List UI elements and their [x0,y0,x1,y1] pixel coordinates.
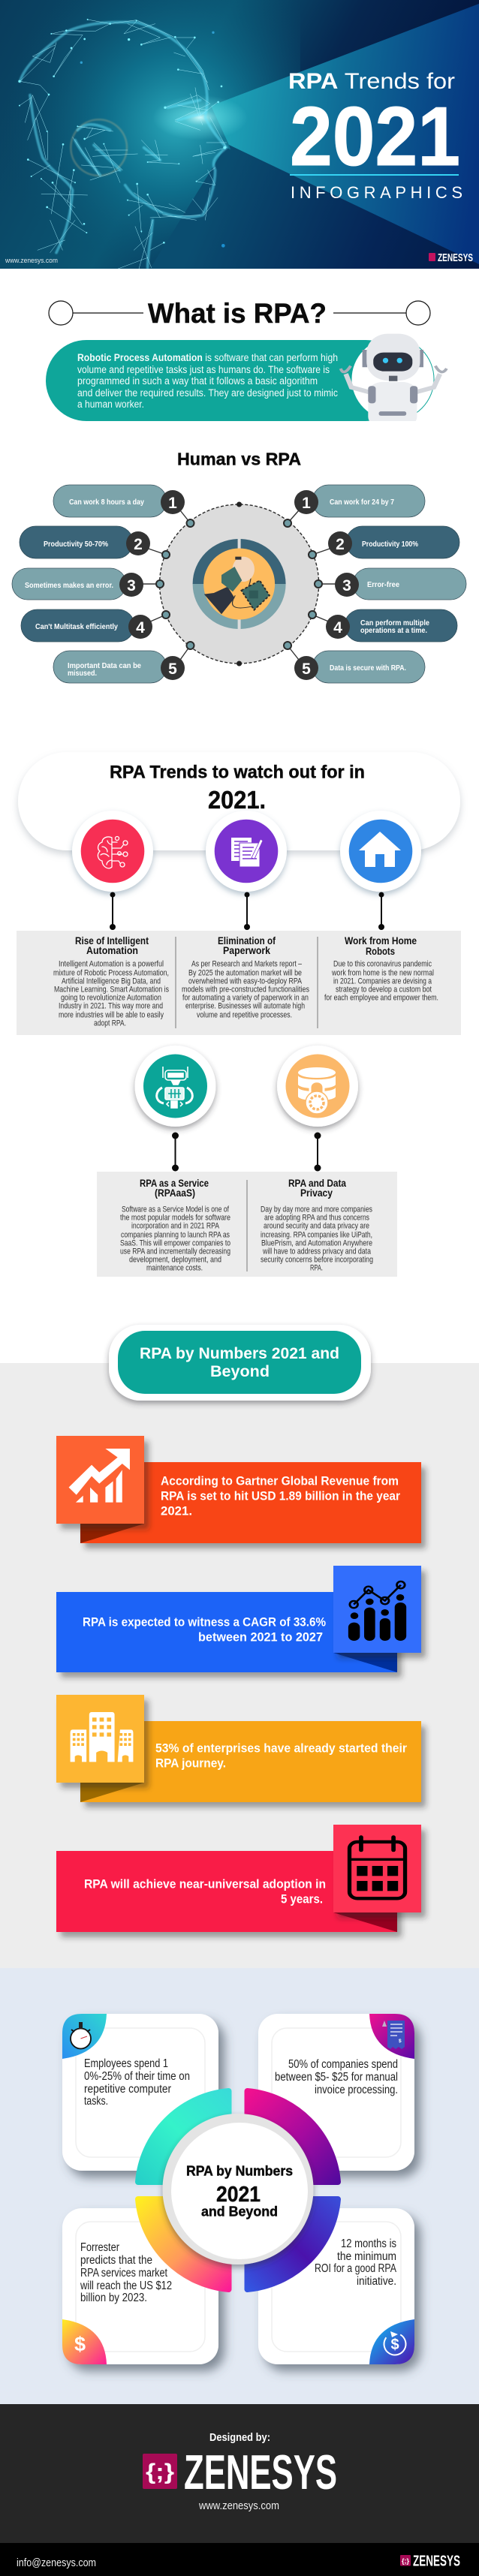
illustration: wireframe head [18,19,248,269]
trend: work from home robots: for each employee and empower them. [324,994,438,1003]
connectors: top row [110,892,384,930]
RPA item 3: 3 [342,577,351,594]
icon: invoice [382,2021,405,2049]
connector lines [139,510,339,660]
human item 3: Sometimes makes an error. [25,581,113,590]
icon: buildings [71,1712,133,1762]
human item 2: Productivity 50-70% [44,540,109,549]
trend: elimination of paperwork: for automating a variety of paperwork in an [182,994,309,1003]
logo: small [400,2553,460,2570]
trend: elimination of paperwork: Paperwork [223,945,270,956]
text [155,1741,408,1770]
card: ROI [258,2208,414,2364]
trend: rise of intelligent automation [53,935,169,1028]
icon: dollar: $ [74,2333,86,2355]
hero title: 2021 [290,90,460,183]
icon: human and robot handshake [204,557,270,614]
definition text: and deliver the required results. They are designed just to mimic [77,387,338,399]
trend: RPA as a service: RPA as a Service [140,1178,209,1189]
center ring: RPA by numbers [138,2091,338,2289]
heading: RPA by numbers: RPA by Numbers 2021 and [140,1344,339,1362]
text: invoice processing. [315,2084,398,2096]
human item 5: misused. [68,669,97,678]
human item 1: 1 [168,495,177,512]
text [275,2058,398,2096]
RPA item 2 [328,526,459,558]
trend: rise of intelligent automation: Automation [86,945,138,956]
trend: work from home robots: Due to this coronavirus pandemic [333,959,432,968]
center text: and Beyond [201,2204,278,2219]
text [84,2057,190,2108]
text: between 2021 to 2027 [198,1630,323,1644]
trend: RPA and data privacy: BluePrism, and Automation Anywhere [261,1238,372,1247]
text: 2021. [161,1504,192,1518]
trend: RPA and data privacy: are adopting RPA and thus concerns [264,1213,369,1222]
RPA item 3: Error-free [367,580,399,589]
trend: RPA and data privacy: Privacy [300,1187,333,1199]
panel: three trends [17,931,461,1035]
text: RPA will achieve near-universal adoption in [84,1878,326,1891]
hero logo [429,253,473,261]
card: invoice processing [258,2014,414,2171]
text: RPA is set to hit USD 1.89 billion in the year [161,1489,401,1503]
definition text: a human worker. [77,399,144,410]
human item 3: 3 [127,577,136,594]
trend icons row [72,811,421,892]
trend: RPA as a service: development, deployment, and [129,1255,221,1264]
footer bar: info@zenesys.com [17,2556,96,2569]
RPA item 1: 1 [302,495,311,512]
trend: rise of intelligent automation: Intelligent Automation is a powerful [59,959,164,968]
definition text: Robotic Process Automation is software that can perform high [77,352,338,363]
hero title: INFOGRAPHICS [291,183,462,202]
icon: invoice: $ [399,2039,402,2044]
human item 5: 5 [168,661,177,678]
text: the minimum [337,2250,396,2263]
dots and nodes [156,501,322,667]
RPA item 3 [335,568,466,600]
logo: large: ZENESYS [184,2445,337,2499]
ring segments [138,2091,338,2289]
text: billion by 2023. [80,2292,147,2304]
trend: rise of intelligent automation: Rise of Intelligent [75,935,149,946]
trend: elimination of paperwork: As per Research and Markets report – [191,959,303,968]
trend: rise of intelligent automation: mixture of Robotic Process Automation, [53,968,169,977]
trend: RPA as a service: companies planning to launch RPA as [121,1231,230,1240]
icon: growth arrow [69,1449,130,1503]
hero website: www.zenesys.com [5,257,58,265]
trend: rise of intelligent automation: Industry in 2021. This way more and [59,1001,163,1010]
RPA item 2: 2 [336,536,345,553]
footer: designed by: Designed by: [209,2431,270,2444]
text: initiative. [357,2275,396,2288]
card: services market [62,2208,218,2364]
text: Forrester [80,2241,119,2254]
trend: elimination of paperwork: volume and repetitive processes. [197,1010,292,1019]
human item 4: Can't Multitask efficiently [35,622,118,631]
central disc [160,504,319,664]
trend: RPA as a service: use RPA and incrementally decreasing [120,1247,230,1256]
logo: small: {;} [402,2557,409,2565]
text: RPA is expected to witness a CAGR of 33.6% [83,1615,326,1629]
definition text: programmed in such a way that it follows a basic algorithm [77,375,318,387]
trend: elimination of paperwork: models with pre-constructed functionalities [182,985,309,994]
trend: RPA and data privacy: RPA. [310,1264,323,1273]
text [84,1878,326,1906]
ring around handshake [193,539,286,629]
text: 0%-25% of their time on [84,2070,190,2083]
heading: RPA by numbers: Beyond [210,1362,270,1380]
trend: RPA as a service: (RPAaaS) [155,1187,195,1199]
text: According to Gartner Global Revenue from [161,1474,399,1488]
heading: human vs RPA: Human vs RPA [177,449,301,468]
RPA item 1: Can work for 24 by 7 [330,498,394,507]
trend: elimination of paperwork: Elimination of [218,935,276,946]
footer: designed by: www.zenesys.com [198,2500,279,2512]
trend: elimination of paperwork [182,935,309,1019]
RPA item 5: 5 [302,661,311,678]
text: repetitive computer [84,2083,171,2096]
RPA item 4: operations at a time. [360,626,427,635]
trend: work from home robots: strategy to develop a custom bot [336,985,432,994]
text: ROI for a good RPA [315,2262,397,2275]
icon: brain [72,811,153,892]
text: 5 years. [281,1893,323,1906]
trend: work from home robots: Robots [366,946,395,957]
panel: two trends [97,1172,397,1277]
hero banner [0,0,479,269]
trend: work from home robots: work from home is the new normal [331,968,434,977]
center text: RPA by Numbers [186,2163,293,2178]
logo: large [143,2445,337,2499]
RPA item 5 [294,651,425,683]
RPA item 4 [326,609,457,642]
trend: RPA as a service: Software as a Service Model is one of [122,1205,230,1214]
icon: chart with line [348,1581,406,1641]
text: between $5- $25 for manual [275,2071,398,2084]
text: RPA services market [80,2267,168,2280]
icon: calendar [349,1835,405,1898]
footer bar [17,2553,460,2570]
trend: rise of intelligent automation: going to revolutionize Automation [61,994,161,1003]
text: RPA journey. [155,1756,226,1770]
panel: RPA definition [46,334,447,428]
RPA item 4: Can perform multiple [360,618,429,627]
text: predicts that the [80,2254,152,2267]
trend: work from home robots: Work from Home [345,935,417,946]
definition text [77,352,338,410]
center text [186,2163,293,2219]
trend: rise of intelligent automation: more industries will be able to easily [59,1010,164,1019]
human item 3 [12,568,143,600]
stat ribbon: Gartner revenue [56,1436,421,1543]
icon: stopwatch [71,2022,91,2049]
trend: RPA and data privacy: will have to address privacy and data [262,1247,372,1256]
stat ribbon: enterprises [56,1695,421,1802]
trend: RPA as a service: the most popular models for software [120,1213,230,1222]
heading: what is RPA: What is RPA? [148,297,327,329]
human item 1: Can work 8 hours a day [69,498,144,507]
connectors: second row [172,1132,321,1171]
icon: home [340,811,421,892]
human item 2 [20,526,150,558]
human item 5: Important Data can be [68,661,141,670]
trend: RPA as a service: SaaS. This will empower companies to [120,1238,230,1247]
trend: work from home robots: in 2021. Companies are devising a [333,977,432,986]
trend: elimination of paperwork: enterprise. Businesses will automate high [185,1001,305,1010]
stat ribbon: universal adoption [56,1825,421,1932]
human item 4 [21,609,152,642]
trend: RPA and data privacy [261,1178,373,1273]
heading: RPA trends: RPA Trends to watch out for in [110,763,365,782]
text: 12 months is [341,2237,396,2250]
trend: RPA and data privacy: Day by day more and more companies [261,1205,372,1214]
trend: RPA and data privacy: RPA and Data [288,1178,346,1189]
icon: return on investment [380,2329,410,2359]
text: will reach the US $12 [80,2280,172,2292]
trend: RPA as a service: maintenance costs. [146,1264,203,1273]
trend: elimination of paperwork: By 2025 the automation market will be [188,968,302,977]
heading: RPA trends [18,752,460,850]
trend: RPA as a service [120,1178,230,1273]
text [80,2241,172,2304]
trend icons second row [135,1046,358,1127]
text [161,1474,401,1518]
trend: RPA and data privacy: security concerns before incorporating [261,1255,373,1264]
center disc [162,2114,314,2265]
trend: work from home robots [324,935,438,1003]
definition text: volume and repetitive tasks just as humans do. The software is [77,364,330,375]
text: 53% of enterprises have already started their [155,1741,408,1755]
trend: rise of intelligent automation: Artificial Intelligence Big Data, and [62,977,161,986]
logo: large: {;} [146,2460,174,2484]
heading: RPA trends: 2021. [208,786,266,814]
human item 5 [53,651,185,683]
stat ribbon: CAGR [56,1566,421,1672]
hero title: RPA Trends for [288,69,455,94]
hero title [288,69,462,202]
card: employee time [62,2014,218,2171]
icon: paperwork [206,811,287,892]
icon: return on investment: $ [390,2337,399,2353]
icon: data privacy [277,1046,358,1127]
text [315,2237,397,2288]
footer: designed by [143,2431,337,2512]
section backgrounds [0,1363,479,2576]
trend: elimination of paperwork: overwhelmed with easy-to-deploy RPA [188,977,303,986]
trend: RPA and data privacy: around security and data privacy are [264,1222,369,1231]
text: tasks. [84,2095,108,2108]
RPA item 2: Productivity 100% [362,540,419,549]
trend: rise of intelligent automation: adopt RPA. [94,1019,126,1028]
text: Employees spend 1 [84,2057,168,2070]
heading: RPA by numbers [109,1325,371,1401]
center text: 2021 [216,2183,261,2207]
human item 1 [53,485,185,517]
human item 2: 2 [134,536,143,553]
heading: what is RPA [49,297,430,329]
RPA item 1 [294,485,425,517]
trend: RPA and data privacy: increasing. RPA companies like UiPath, [261,1231,372,1240]
RPA item 4: 4 [333,619,342,636]
trend: RPA as a service: incorporation and in 2021 RPA [131,1222,220,1231]
human item 4: 4 [136,619,145,636]
icon: robot [341,334,447,428]
diagram: human vs RPA [12,485,466,683]
RPA item 5: Data is secure with RPA. [330,664,406,673]
text [83,1615,326,1644]
trend: rise of intelligent automation: Machine Learning. Smart Automation is [54,985,169,994]
text: 50% of companies spend [288,2058,398,2071]
icon: RPA as a service robot [135,1046,216,1127]
